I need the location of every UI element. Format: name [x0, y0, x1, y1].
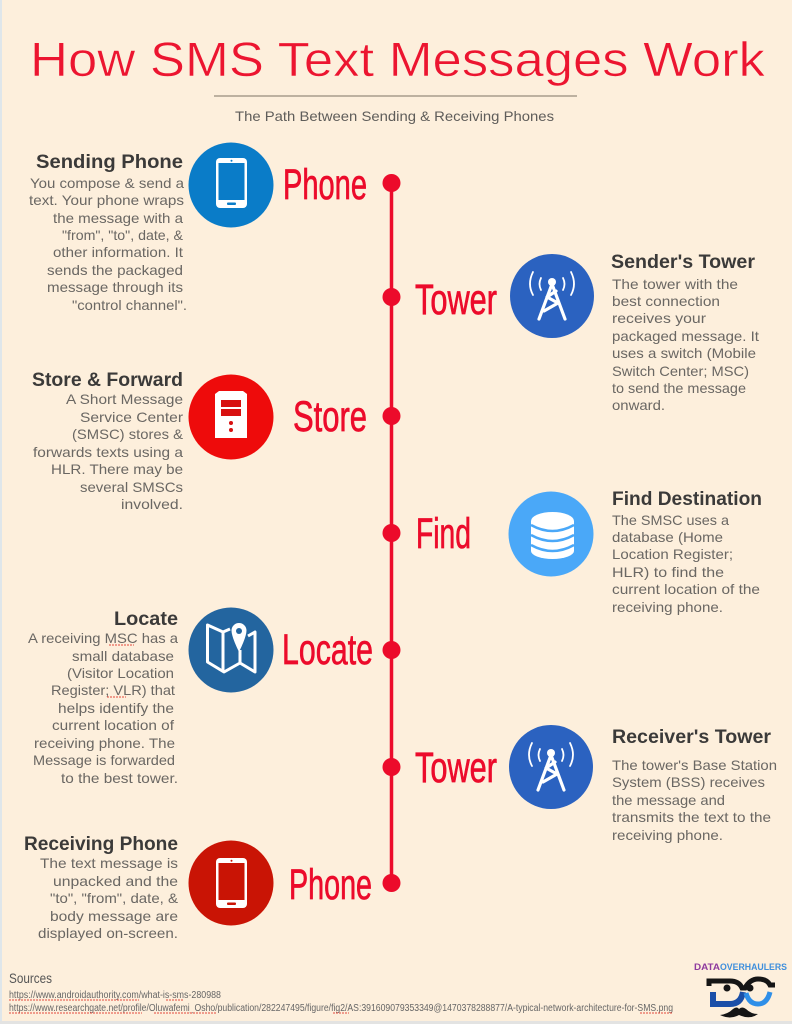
panel: receiver's tower: [612, 727, 777, 843]
timeline: [382, 174, 400, 892]
panel: receiver's tower: the message and: [612, 792, 725, 808]
panel: store and forward: [32, 370, 184, 512]
panel: find destination: [612, 489, 762, 615]
panel: sending phone: other information. It: [53, 244, 183, 260]
title: How SMS Text Messages Work: [30, 33, 766, 87]
panel: find destination: Find Destination: [612, 489, 762, 510]
sources: https://www.researchgate.net/profile/Oluwafemi_Osho/publication/282247495/figure/fig2/AS:391609079353349@1470378288877/A-typical-network-architecture-for-SMS.png: [9, 1003, 673, 1014]
sources: Sources: [9, 970, 52, 986]
panel: locate: to the best tower.: [61, 770, 178, 786]
panel: locate: helps identify the: [58, 700, 174, 716]
panel: locate: [28, 609, 178, 786]
panel: locate: small database: [72, 648, 174, 664]
icon: database: [508, 492, 594, 576]
panel: sending phone: text. Your phone wraps: [29, 192, 184, 208]
panel: receiving phone: Receiving Phone: [24, 834, 178, 855]
panel: find destination: HLR) to find the: [612, 564, 724, 580]
panel: sender's tower: uses a switch (Mobile: [612, 345, 756, 361]
panel: find destination: current location of the: [612, 581, 760, 597]
panel: find destination: receiving phone.: [612, 599, 723, 615]
logo: Data Overhaulers: DATA: [694, 962, 721, 972]
panel: find destination: The SMSC uses a: [612, 512, 729, 528]
label: Store: Store: [293, 393, 367, 441]
panel: sending phone: "from", "to", date, &: [62, 227, 184, 243]
label: Locate: Locate: [282, 626, 373, 674]
panel: store and forward: Store & Forward: [32, 370, 183, 391]
panel: sender's tower: [611, 252, 759, 413]
panel: sender's tower: receives your: [612, 310, 706, 326]
panel: sender's tower: The tower with the: [612, 276, 738, 292]
panel: locate: current location of: [52, 717, 174, 733]
icon: store server: [188, 374, 274, 460]
panel: store and forward: several SMSCs: [80, 479, 183, 495]
label: Tower: Tower: [415, 276, 497, 324]
panel: sending phone: Sending Phone: [36, 152, 183, 173]
icon: receiver's tower: [509, 725, 593, 809]
panel: sender's tower: Switch Center; MSC): [612, 363, 749, 379]
panel: store and forward: A Short Message: [66, 391, 183, 407]
icon: receiving phone: [188, 840, 274, 926]
panel: receiving phone: [24, 834, 179, 941]
panel: sender's tower: onward.: [612, 397, 665, 413]
icon: sending phone: [188, 142, 274, 228]
panel: receiver's tower: Receiver's Tower: [612, 727, 772, 748]
panel: store and forward: forwards texts using a: [33, 444, 183, 460]
panel: receiver's tower: transmits the text to the: [612, 809, 771, 825]
logo: Data Overhaulers: [694, 962, 787, 1018]
panel: sending phone: the message with a: [53, 210, 183, 226]
panel: store and forward: involved.: [121, 496, 183, 512]
subtitle: The Path Between Sending & Receiving Phones: [235, 108, 554, 124]
panel: receiving phone: body message are: [50, 908, 178, 924]
sources: https://www.androidauthority.com/what-is-sms-280988: [9, 990, 221, 1001]
panel: locate: (Visitor Location: [67, 665, 174, 681]
panel: find destination: database (Home: [612, 529, 723, 545]
panel: sender's tower: Sender's Tower: [611, 252, 756, 273]
panel: receiver's tower: receiving phone.: [612, 827, 723, 843]
panel: receiving phone: "to", "from", date, &: [50, 890, 179, 906]
panel: store and forward: HLR. There may be: [51, 461, 183, 477]
panel: receiving phone: The text message is: [40, 855, 178, 871]
panel: sender's tower: packaged message. It: [612, 328, 759, 344]
panel: receiver's tower: System (BSS) receives: [612, 774, 765, 790]
panel: locate: Message is forwarded: [33, 752, 175, 768]
panel: sending phone: You compose & send a: [30, 175, 184, 191]
panel: find destination: Location Register;: [612, 546, 733, 562]
panel: receiving phone: displayed on-screen.: [38, 925, 178, 941]
panel: sending phone: [29, 152, 187, 313]
panel: sender's tower: to send the message: [612, 380, 746, 396]
panel: receiver's tower: The tower's Base Station: [612, 757, 777, 773]
label: Phone 2: Phone: [289, 861, 372, 909]
logo: Data Overhaulers: OVERHAULERS: [720, 962, 787, 972]
panel: store and forward: Service Center: [80, 409, 183, 425]
panel: sending phone: "control channel".: [72, 297, 187, 313]
label: Find: Find: [416, 510, 471, 558]
panel: sending phone: sends the packaged: [47, 262, 183, 278]
icon: sender's tower: [510, 254, 594, 338]
label: Phone: Phone: [283, 161, 367, 209]
panel: receiving phone: unpacked and the: [53, 873, 178, 889]
panel: locate: Register; VLR) that: [51, 682, 175, 698]
icon: map pin: [188, 608, 274, 692]
sources: [9, 970, 673, 1014]
panel: store and forward: (SMSC) stores &: [72, 426, 184, 442]
panel: locate: receiving phone. The: [34, 735, 175, 751]
panel: locate: Locate: [114, 609, 178, 630]
panel: sender's tower: best connection: [612, 293, 720, 309]
label: Tower 2: Tower: [415, 744, 497, 792]
panel: sending phone: message through its: [47, 279, 183, 295]
panel: locate: A receiving MSC has a: [28, 630, 178, 646]
